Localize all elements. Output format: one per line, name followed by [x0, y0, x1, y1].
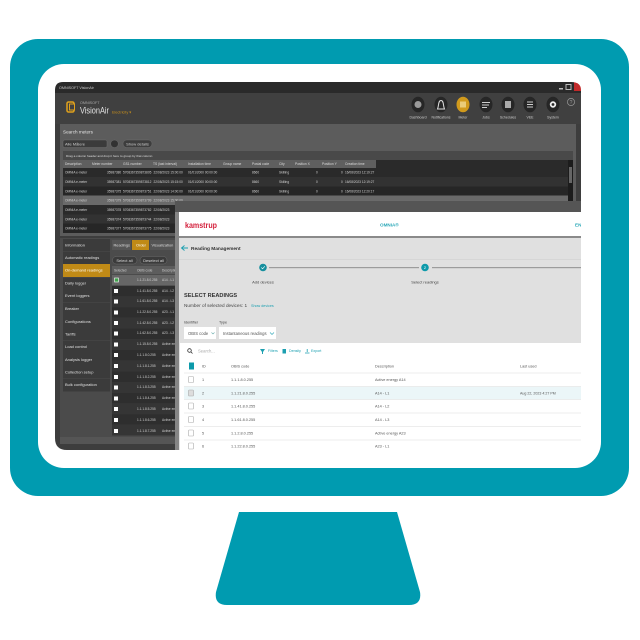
highlighted row [184, 386, 581, 400]
OBIS readings table: 1.1.1.8.7.255 [137, 429, 156, 433]
icon: Meter [456, 97, 470, 120]
OBIS readings table: 1.1.15.8.0.255 [137, 342, 158, 346]
row text: 5 [202, 431, 204, 435]
select readings heading [184, 293, 274, 308]
table rows: 35987374 [107, 218, 121, 222]
OBIS readings table: Description [162, 268, 178, 272]
meters table [63, 160, 573, 233]
row text: Active energy A23 [375, 431, 406, 435]
icon: Schedules: Schedules [500, 116, 516, 120]
icon: Dashboard: Dashboard [409, 116, 427, 120]
table header: City [279, 162, 285, 166]
icon: Jobs: Jobs [482, 116, 490, 120]
identifier dropdown: OBIS code [188, 331, 209, 336]
kamstrup header: kamstrup [185, 220, 217, 230]
table rows: 35987377 [107, 226, 121, 230]
icon: VEE: VEE [526, 116, 534, 120]
OBIS readings table: 1.1.42.8.0.255 [137, 321, 158, 325]
logo: OMNISOFT [80, 101, 100, 105]
search meters panel: Search meters [63, 130, 94, 134]
table rows: 8660 [252, 170, 259, 174]
table rows: Skilling [279, 180, 289, 184]
OBIS readings table: 1.1.1.8.2.255 [137, 375, 156, 379]
table toolbar: Search... [198, 348, 215, 354]
table rows: Skilling [279, 190, 289, 194]
table rows: 35987379 [107, 198, 121, 202]
side menu: Configurations [65, 319, 91, 324]
OBIS readings table: 1.1.61.8.0.255 [137, 299, 158, 303]
page title: Reading Management [191, 246, 241, 252]
row text: 6 [202, 444, 204, 448]
icon: Notifications [431, 97, 451, 120]
table rows: 5708367359873805 [123, 170, 152, 174]
OBIS readings table: Active energy [162, 375, 182, 379]
OBIS readings table: 1.1.1.8.5.255 [137, 407, 156, 411]
step 2: 2 [424, 265, 427, 270]
table rows: 22/08/2023 [154, 218, 170, 222]
row text: A23 - L1 [375, 444, 389, 448]
table header [63, 160, 376, 168]
icon: System [546, 97, 560, 120]
table rows: 16/08/2023 12:19:27 [345, 170, 374, 174]
meter filter dropdown: Alle Målere [65, 141, 86, 146]
table rows: 0 [316, 170, 318, 174]
OBIS readings table: 1.1.1.8.0.255 [137, 353, 156, 357]
meter filter dropdown [63, 140, 107, 148]
row checkboxes [188, 376, 194, 449]
OBIS readings table: Active energy [162, 353, 182, 357]
table rows: 5708367359873775 [123, 226, 152, 230]
OBIS readings table: 1.1.41.8.0.255 [137, 289, 158, 293]
table header: TS (last interval) [153, 162, 177, 166]
side menu: Daily logger [65, 280, 87, 286]
table rows: 5708367359873751 [123, 190, 152, 194]
table header: Postal code [252, 162, 269, 166]
OBIS readings table: A23 - L1 [162, 310, 174, 314]
icon: Notifications: Notifications [431, 116, 451, 120]
monitor screen bezel [38, 64, 601, 468]
column headers: ID [202, 364, 206, 368]
step 2 [411, 264, 439, 284]
icon: Meter: Meter [459, 116, 468, 120]
side menu: Information [65, 242, 85, 248]
table rows: 01/01/2000 00:00:00 [188, 190, 217, 194]
table rows: 35987381 [107, 180, 121, 184]
row text: 1.1.1.8.0.255 [231, 378, 253, 382]
side menu: Event loggers [65, 293, 89, 298]
monitor stand [216, 512, 420, 605]
show details button [123, 140, 152, 148]
step 1 [252, 264, 274, 284]
table rows: 35987378 [107, 208, 121, 212]
OBIS readings table: A23 - L3 [162, 331, 174, 335]
table toolbar: Export [311, 349, 321, 353]
table rows: OMNIA e-meter [65, 180, 88, 184]
row text: Active energy A14 [375, 378, 406, 382]
table rows: OMNIA e-meter [65, 208, 88, 212]
side menu: Collection setup [65, 370, 94, 374]
icon: Schedules [500, 97, 516, 120]
identifier dropdown [184, 320, 216, 339]
table rows: 01/01/2000 00:00:00 [188, 170, 217, 174]
group-by hint bar [63, 151, 573, 160]
OBIS readings table: 1.1.21.8.0.255 [137, 278, 158, 282]
table rows: 22/08/2023 15:15:00 [154, 180, 183, 184]
OBIS readings table: Active energy [162, 342, 182, 346]
icon: VEE [524, 97, 536, 120]
logo [67, 101, 131, 116]
table rows: 01/01/2000 00:00:00 [188, 180, 217, 184]
kamstrup header [179, 212, 582, 238]
OBIS readings table: Active energy [162, 407, 182, 411]
table rows: 0 [341, 180, 343, 184]
table header: Position Y [322, 162, 338, 166]
title bar: OMNISOFT VisionAir [59, 86, 95, 90]
row text: 1.1.41.8.0.255 [231, 404, 255, 408]
table header: Meter number [92, 162, 113, 166]
table rows: OMNIA e-meter [65, 218, 88, 222]
side menu: Breaker [65, 306, 80, 311]
step 1: Add devices [252, 280, 274, 284]
OBIS readings table: 1.1.62.8.0.255 [137, 331, 158, 335]
select readings heading: SELECT READINGS [184, 293, 237, 299]
row text: A14 - L2 [375, 404, 389, 408]
OBIS readings table: 1.1.1.8.1.255 [137, 364, 156, 368]
OBIS readings table: A14 - L3 [162, 299, 174, 303]
table rows: 16/08/2023 12:19:27 [345, 180, 374, 184]
logo: VisionAir [80, 106, 109, 116]
title bar [55, 82, 581, 93]
logo: Electricity ▾ [112, 110, 131, 114]
table rows: OMNIA e-meter [65, 190, 88, 194]
side menu: Analysis logger [65, 357, 93, 362]
table header: Installation time [188, 162, 211, 166]
table rows [63, 171, 568, 230]
table rows: OMNIA e-meter [65, 226, 88, 230]
type dropdown: Instantaneous readings [223, 331, 267, 336]
kamstrup header: OMNIA® [380, 222, 399, 228]
table rows: 22/08/2023 [154, 208, 170, 212]
readings tabs: Readings [114, 242, 130, 248]
group-by hint bar: Drag a column header and drop it here to group by that column [66, 154, 153, 158]
table toolbar: Filters [268, 349, 278, 353]
step 2: Select readings [411, 280, 439, 284]
table rows: 5708367359873782 [123, 208, 152, 212]
row text: 1.1.22.8.0.255 [231, 444, 255, 448]
toolbar [66, 96, 575, 120]
row text: 4 [202, 418, 204, 422]
table scrollbar [568, 160, 573, 201]
OBIS readings table: Selected [114, 268, 127, 272]
kamstrup header: EN [575, 222, 582, 228]
select all buttons: Select all [116, 258, 133, 263]
stepper [179, 259, 581, 284]
table rows: 35987375 [107, 190, 121, 194]
icon: Jobs [480, 97, 492, 120]
column headers: OBIS code [231, 364, 249, 368]
table header: Creation time [345, 162, 365, 166]
select readings heading: Show devices [251, 304, 274, 308]
OBIS readings table: Active energy [162, 385, 182, 389]
side menu: On-demand readings [65, 268, 103, 272]
readings tabs: Order [136, 242, 147, 248]
table rows: 0 [316, 190, 318, 194]
page title [182, 246, 241, 252]
OBIS readings table: A23 - L2 [162, 321, 174, 325]
table header: Description [65, 162, 82, 166]
search meters panel [60, 124, 576, 236]
OBIS readings table: 1.1.1.8.6.255 [137, 418, 156, 422]
show details button: Show details [126, 141, 149, 146]
table header: Group name [223, 162, 241, 166]
side menu [63, 239, 110, 392]
table rows: 8660 [252, 190, 259, 194]
identifier dropdown: Identifier [184, 320, 199, 324]
row text: Aug 22, 2023 4:27 PM [520, 391, 556, 395]
icon: help: ? [570, 100, 573, 106]
table rows: 0 [316, 180, 318, 184]
icon: help [567, 98, 575, 106]
row text: A14 - L1 [375, 391, 389, 395]
table rows: 5708367359873812 [123, 180, 152, 184]
OBIS readings table: A14 - L1 [162, 278, 174, 282]
column headers [189, 362, 536, 370]
column headers: Description [375, 364, 394, 368]
table rows: 5708367359873744 [123, 218, 152, 222]
OBIS readings table: 1.1.22.8.0.255 [137, 310, 158, 314]
OBIS readings table: 1.1.1.8.3.255 [137, 385, 156, 389]
readings tabs [112, 240, 175, 250]
row text: 1.1.61.8.0.255 [231, 418, 255, 422]
OBIS readings table: 1.1.1.8.4.255 [137, 396, 156, 400]
select all buttons [112, 256, 167, 264]
refresh button [111, 140, 118, 148]
table rows: OMNIA e-meter [65, 198, 88, 202]
type dropdown: Type [219, 320, 227, 324]
table header: GS1 number [123, 162, 143, 166]
table rows: 8660 [252, 180, 259, 184]
table rows: 22/08/2023 15:00:00 [154, 198, 183, 202]
side menu: Tariffs [65, 332, 76, 336]
table rows: 0 [341, 190, 343, 194]
screenshot area [55, 82, 582, 450]
row text: 1.1.2.8.0.255 [231, 431, 253, 435]
table rows: 22/08/2023 14:00:00 [154, 190, 183, 194]
readings data table [180, 343, 581, 450]
table rows: Skilling [279, 170, 289, 174]
row text: 1 [202, 378, 204, 382]
OBIS readings table: Active energy [162, 364, 182, 368]
table rows: OMNIA e-meter [65, 170, 88, 174]
row text: A14 - L3 [375, 418, 389, 422]
readings tabs: Visualization [152, 242, 173, 248]
OBIS readings table: A14 - L2 [162, 289, 174, 293]
row text: 2 [202, 391, 204, 395]
VisionAir application window [55, 82, 581, 450]
OBIS readings table: Active energy [162, 429, 182, 433]
table rows: 16/08/2023 12:20:17 [345, 190, 374, 194]
OBIS readings table: OBIS code [137, 268, 153, 272]
table rows: 22/08/2023 [154, 226, 170, 230]
table toolbar [188, 348, 321, 354]
select all buttons: Deselect all [143, 258, 164, 263]
table toolbar: Density [289, 349, 301, 353]
icon: Dashboard [409, 97, 427, 120]
table rows: 5708367359873799 [123, 198, 152, 202]
table header: Position X [295, 162, 311, 166]
row text [202, 378, 556, 448]
OBIS readings table: Active energy [162, 418, 182, 422]
icon: System: System [547, 116, 559, 120]
select readings heading: Number of selected devices: 1 [184, 303, 247, 308]
column headers: Last used [520, 364, 536, 368]
side menu: Automatic readings [65, 255, 99, 260]
table rows: 0 [341, 170, 343, 174]
OBIS readings table [112, 266, 182, 436]
side menu: Bulk configuration [65, 382, 97, 387]
lower panel background [60, 437, 175, 444]
row text: 3 [202, 404, 204, 408]
OBIS readings table: Active energy [162, 396, 182, 400]
OMNIA reading management window [175, 201, 582, 450]
monitor frame [10, 39, 629, 496]
side menu: Load control [65, 344, 87, 349]
table rows: 22/08/2023 15:00:00 [154, 170, 183, 174]
table rows: 35987380 [107, 170, 121, 174]
type dropdown [219, 320, 276, 339]
row text: 1.1.21.8.0.255 [231, 391, 255, 395]
